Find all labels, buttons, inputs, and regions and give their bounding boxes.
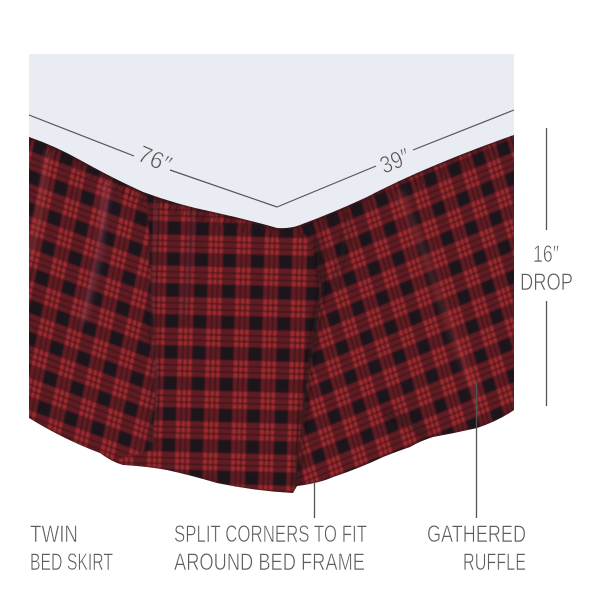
bed sheet: [29, 54, 514, 230]
pointer line: split corners: [314, 482, 316, 518]
label: 16 inch drop: DROP: [520, 269, 573, 296]
caption: twin bed skirt: TWIN: [30, 521, 78, 548]
dimension line: 76 inch width: [29, 115, 277, 207]
caption: twin bed skirt: [30, 521, 113, 576]
drop arrow line: lower: [546, 301, 548, 406]
label: 39 inches: 39″: [376, 143, 414, 180]
label: 16 inch drop: 16″: [533, 241, 559, 268]
gathered ruffle seam pleats: [29, 141, 514, 234]
plaid panels: [20, 125, 520, 500]
label: 76 inches: 76″: [134, 141, 176, 179]
caption: gathered ruffle: [427, 521, 526, 576]
caption: gathered ruffle: GATHERED: [427, 521, 526, 548]
drop arrow line: upper: [546, 128, 548, 230]
caption: gathered ruffle: RUFFLE: [463, 549, 526, 576]
caption: split corners: [174, 521, 367, 576]
hem shadow: [29, 410, 514, 493]
caption: split corners: AROUND BED FRAME: [174, 549, 365, 576]
pointer line: gathered ruffle: [476, 382, 478, 518]
dimension line: 39 inch depth: [277, 110, 514, 207]
caption: split corners: SPLIT CORNERS TO FIT: [174, 521, 367, 548]
fabric folds and gathers: [30, 150, 478, 488]
label: 16 inch drop: [520, 241, 573, 296]
bed skirt fabric: [20, 125, 520, 500]
gathered ruffle seam shadow: [29, 135, 514, 228]
caption: twin bed skirt: BED SKIRT: [30, 549, 113, 576]
